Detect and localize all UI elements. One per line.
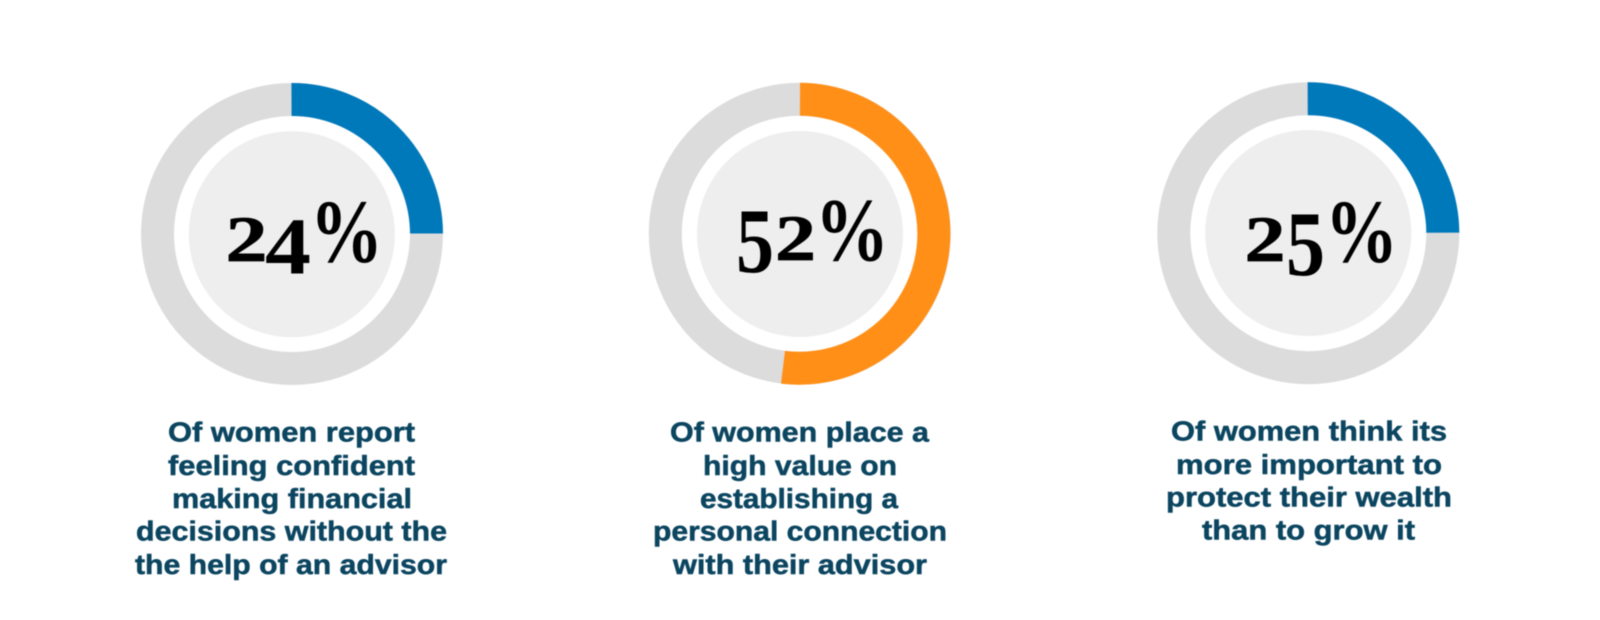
caption: personal connection: personal connection xyxy=(653,516,947,547)
value: 24%: % xyxy=(310,183,383,282)
panel: 24% confident without an advisor xyxy=(135,99,447,580)
donut chart: 52% xyxy=(665,99,934,368)
caption: confident without an advisor: the help of an advisor xyxy=(135,549,447,580)
value: 52% xyxy=(736,182,889,292)
value: 24%: 4 xyxy=(265,204,311,292)
caption: protect wealth: protect their wealth xyxy=(1166,482,1452,513)
donut chart: 25% xyxy=(1174,99,1443,368)
value: 24%: 2 xyxy=(226,204,268,276)
panel: 52% personal connection xyxy=(653,99,947,580)
caption: confident without an advisor xyxy=(135,417,447,580)
value: 25%: 5 xyxy=(1286,193,1325,295)
caption: protect wealth: Of women think its xyxy=(1171,416,1447,447)
value: 25%: 2 xyxy=(1244,204,1286,276)
value: 52%: 2 xyxy=(775,203,816,275)
caption: protect wealth: more important to xyxy=(1176,449,1442,480)
value: 52%: 5 xyxy=(736,190,774,292)
value: 52%: % xyxy=(815,182,889,281)
caption: confident without an advisor: Of women report xyxy=(168,417,415,448)
value: 25%: % xyxy=(1325,183,1398,282)
value: 24% xyxy=(226,183,383,292)
value: 25% xyxy=(1244,183,1398,295)
caption: personal connection: Of women place a xyxy=(670,417,930,448)
donut chart: 24% xyxy=(158,99,426,368)
caption: protect wealth: than to grow it xyxy=(1202,514,1415,545)
caption: protect wealth xyxy=(1166,416,1452,545)
caption: confident without an advisor: making financial xyxy=(172,483,412,514)
caption: personal connection: with their advisor xyxy=(672,549,927,580)
caption: personal connection: establishing a xyxy=(700,483,899,514)
caption: confident without an advisor: feeling confident xyxy=(168,450,415,481)
caption: personal connection: high value on xyxy=(703,450,897,481)
caption: personal connection xyxy=(653,417,947,580)
caption: confident without an advisor: decisions without the xyxy=(136,516,447,547)
panel: 25% protect wealth xyxy=(1166,99,1452,545)
